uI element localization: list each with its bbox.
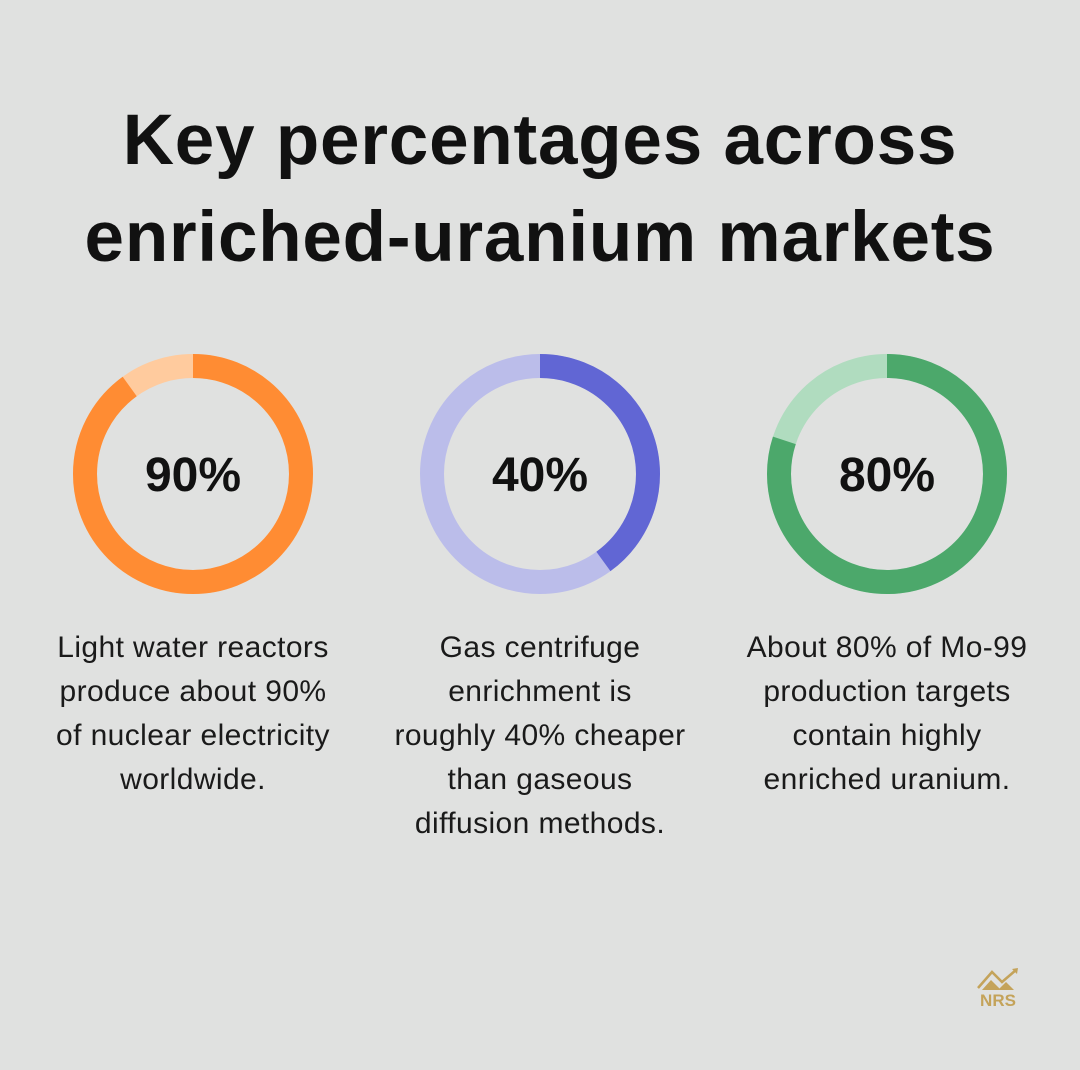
- text: gas centrifuge: [394, 631, 686, 840]
- donut: 40%: 40%: [492, 449, 588, 502]
- text: light water reactors: produce about 90%: [59, 675, 326, 708]
- donut: 80%: [767, 354, 1007, 594]
- text: Mo-99: production targets: [763, 675, 1011, 708]
- text: Mo-99: [746, 631, 1027, 796]
- text: Mo-99: contain highly: [792, 719, 982, 752]
- title: Key percentages across: [123, 101, 957, 180]
- title: enriched-uranium markets: [85, 198, 995, 277]
- text: light water reactors: Light water reactors: [57, 631, 329, 664]
- donut: 90%: 90%: [145, 449, 241, 502]
- text: gas centrifuge: roughly 40% cheaper: [394, 719, 686, 752]
- text: light water reactors: [56, 631, 330, 796]
- text: light water reactors: worldwide.: [120, 763, 266, 796]
- title: [85, 101, 995, 277]
- text: gas centrifuge: than gaseous: [448, 763, 632, 796]
- text: Mo-99: enriched uranium.: [764, 763, 1010, 796]
- text: gas centrifuge: Gas centrifuge: [440, 631, 640, 664]
- donut: 90%: [73, 354, 313, 594]
- logo: NRS: [977, 968, 1018, 1008]
- text: Mo-99: About 80% of Mo-99: [747, 631, 1027, 664]
- text: light water reactors: of nuclear electricity: [56, 719, 330, 752]
- donut: 40%: [420, 354, 660, 594]
- donut: 80%: 80%: [839, 449, 935, 502]
- text: gas centrifuge: enrichment is: [448, 675, 632, 708]
- text: gas centrifuge: diffusion methods.: [415, 807, 665, 840]
